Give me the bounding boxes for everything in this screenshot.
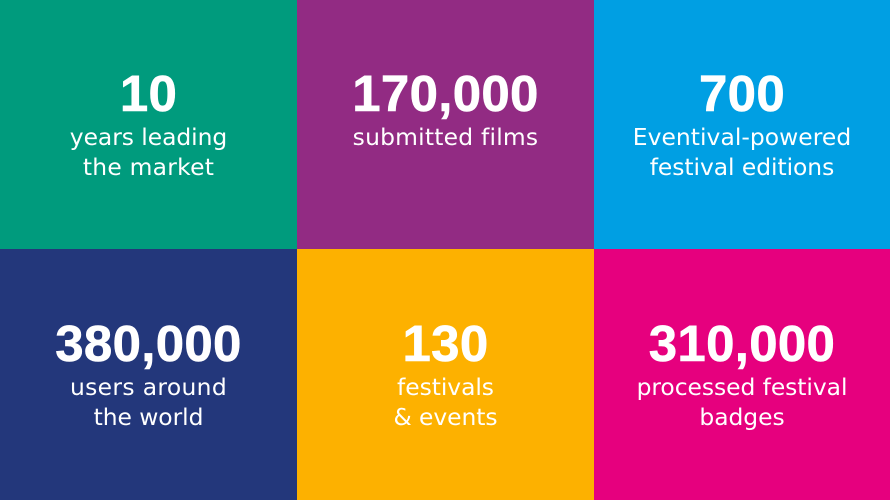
label: festivals & events [393, 373, 498, 430]
label: years leading the market [70, 123, 227, 180]
label: users around the world: users around [70, 373, 227, 401]
label: processed festival badges: processed festival [637, 373, 847, 401]
label: processed festival badges [637, 373, 847, 430]
label: users around the world: the world [94, 402, 203, 430]
panel: submitted films [297, 0, 594, 249]
panel: years [0, 0, 297, 249]
panel: badges [594, 249, 890, 500]
panel: festivals and events [297, 249, 594, 500]
label: festivals & events: festivals [397, 373, 494, 401]
panel: users [0, 249, 297, 500]
number: 170,000: 170,000 [352, 65, 539, 122]
number: 10: 10 [120, 65, 177, 122]
label: years leading the market: the market [83, 152, 214, 180]
label: Eventival-powered festival editions [633, 123, 851, 180]
panel: festival editions [594, 0, 890, 249]
label: Eventival-powered festival editions: festival editions [650, 152, 834, 180]
number: 310,000: 310,000 [649, 315, 835, 372]
number: 700: 700 [699, 65, 785, 122]
label: years leading the market: years leading [70, 123, 227, 151]
label: Eventival-powered festival editions: Eventival-powered [633, 123, 851, 151]
number: 130: 130 [402, 315, 488, 372]
number: 380,000: 380,000 [55, 315, 242, 372]
label: processed festival badges: badges [699, 402, 785, 430]
label: users around the world [70, 373, 227, 430]
label: festivals & events: & events [393, 402, 498, 430]
label: submitted films: submitted films [353, 123, 538, 151]
